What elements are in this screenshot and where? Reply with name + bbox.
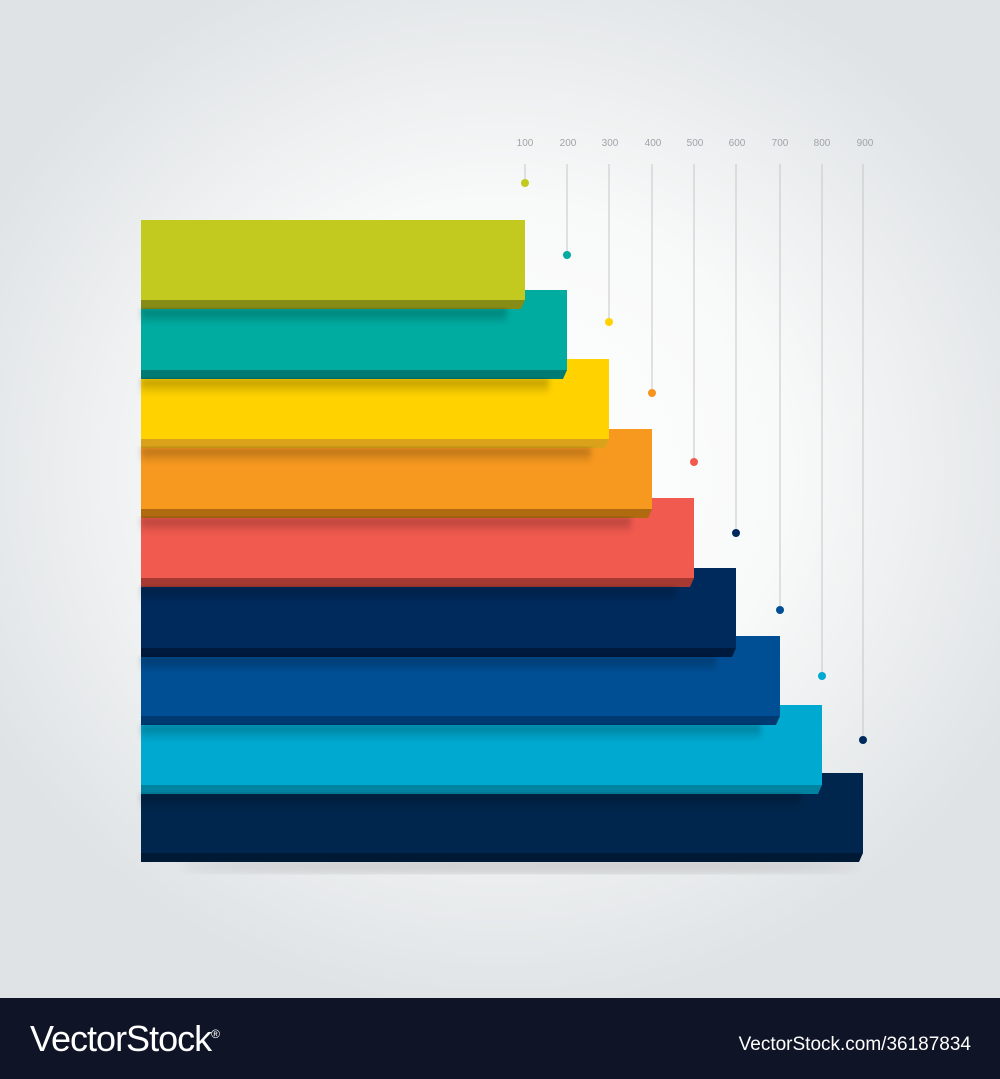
axis labels: 500 bbox=[687, 138, 704, 149]
url text: VectorStock.com/36187834 bbox=[739, 1034, 971, 1055]
floor shadow bbox=[180, 859, 860, 873]
axis labels: 400 bbox=[645, 138, 662, 149]
axis labels: 200 bbox=[560, 138, 577, 149]
axis labels: 800 bbox=[814, 138, 831, 149]
axis labels bbox=[517, 138, 874, 149]
bars (drawn bottom-up) bbox=[141, 220, 863, 862]
axis labels: 100 bbox=[517, 138, 534, 149]
logo text: VectorStock® bbox=[30, 1018, 219, 1059]
guide lines and dots bbox=[525, 164, 863, 740]
axis labels: 700 bbox=[772, 138, 789, 149]
axis labels: 600 bbox=[729, 138, 746, 149]
axis labels: 900 bbox=[857, 138, 874, 149]
footer watermark bbox=[0, 998, 1000, 1079]
axis labels: 300 bbox=[602, 138, 619, 149]
